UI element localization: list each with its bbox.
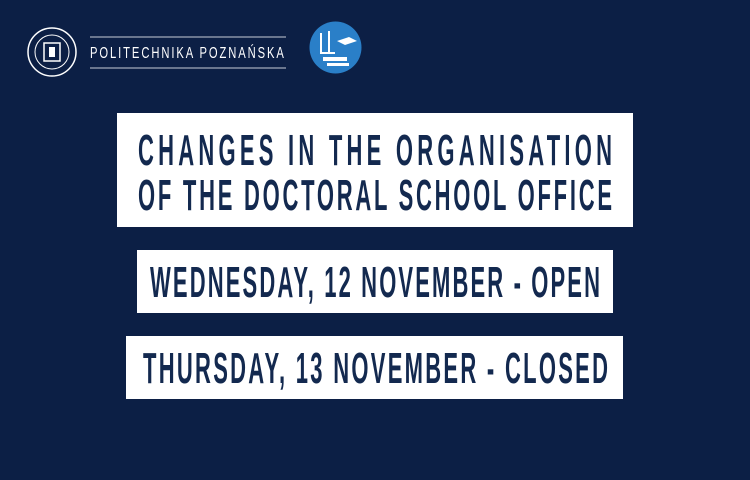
logo: university seal [27, 27, 77, 77]
title box: OF THE DOCTORAL SCHOOL OFFICE [138, 172, 612, 220]
icon: doctoral school [310, 22, 362, 74]
date box: Wednesday open: WEDNESDAY, 12 NOVEMBER - OPEN [150, 259, 600, 307]
logo: wordmark: POLITECHNIKA POZNAŃSKA [90, 43, 285, 61]
title box: CHANGES IN THE ORGANISATION [138, 127, 612, 175]
title box [117, 113, 633, 227]
date box: Thursday closed: THURSDAY, 13 NOVEMBER - CLOSED [143, 345, 608, 393]
